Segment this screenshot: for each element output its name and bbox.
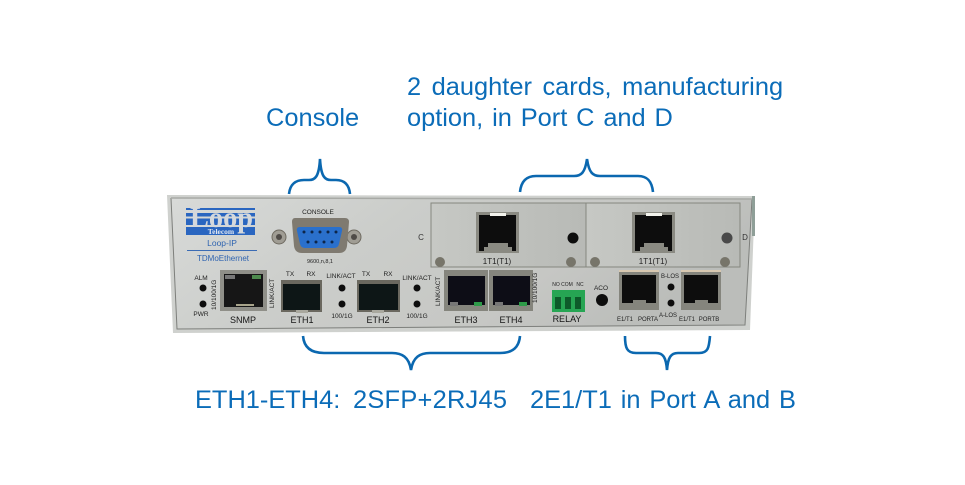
daughter card slot C: 1T1(T1) [483,257,512,266]
LEDs: B-LOS and A-LOS: A-LOS [659,313,677,319]
console connector: CONSOLE [302,209,335,216]
label: TDMoEthernet: TDMoEthernet [197,254,250,263]
LEDs: B-LOS and A-LOS [659,274,679,319]
LEDs: B-LOS and A-LOS: B-LOS [661,274,679,280]
bracket: daughter cards [520,159,653,192]
SNMP port: SNMP [230,315,256,325]
bracket: console [289,159,350,194]
relay connector: NO [552,282,560,288]
SFP port ETH1: RX [306,271,316,278]
LEDs: ETH2 link and speed [402,275,432,320]
SFP port ETH1: TX [286,271,295,278]
relay connector: COM [561,282,573,288]
Port A: PORTA [638,317,658,323]
caption: ETH ports: ETH1-ETH4: [195,386,340,414]
label: 10/100/1G beside ETH4: 10/100/1G [532,273,539,303]
caption: daughter cards: option, in Port C and D [407,104,673,132]
SFP port ETH1: ETH1 [290,315,314,325]
ACO button: ACO [594,285,608,292]
device front panel [167,195,755,333]
status LEDs: ALM and PWR [193,275,209,318]
label: Loop-IP: Loop-IP [207,238,237,248]
caption: daughter cards: 2 daughter cards, manufacturing [407,73,783,101]
ETH4 port [489,270,533,325]
daughter card slot D [586,203,748,267]
SFP port ETH1 [281,271,322,325]
daughter card slot D: D [742,233,748,242]
daughter card slot D: 1T1(T1) [639,257,668,266]
Port B: E1/T1 [679,317,696,323]
ETH3 port [444,270,488,325]
Port A: E1/T1 [617,317,634,323]
caption: daughter cards [407,73,783,132]
label: 10/100/1G: 10/100/1G [211,280,218,310]
status LEDs: ALM and PWR: ALM [194,275,208,282]
ETH3 port: ETH3 [454,315,478,325]
Port A [617,270,659,323]
Port B: PORTB [699,317,719,323]
relay connector: RELAY [553,314,581,324]
LEDs: ETH1 link and speed: 100/1G [331,313,353,320]
ACO button [594,285,608,306]
console connector [272,209,361,265]
daughter card slot C [418,203,586,267]
SFP port ETH2 [357,271,400,325]
LEDs: ETH2 link and speed: LINK/ACT [402,275,432,282]
SFP port ETH2: RX [383,271,393,278]
Port B [679,270,721,323]
status LEDs: ALM and PWR: PWR [193,311,209,318]
caption: ETH ports: 2SFP+2RJ45 [353,386,507,414]
relay connector [552,282,585,324]
LEDs: ETH1 link and speed: LINK/ACT [326,273,356,280]
logo: Loop Telecom: Loop [190,201,253,234]
logo: Loop Telecom: Telecom [208,227,235,236]
ETH4 port: ETH4 [499,315,523,325]
caption: Console: Console [266,104,359,132]
SFP port ETH2: TX [362,271,371,278]
label: LINK/ACT beside ETH3: LINK/ACT [435,277,442,306]
SNMP port [220,270,267,325]
relay connector: NC [576,282,584,288]
caption: E1/T1 ports: 2E1/T1 in Port A and B [530,386,796,414]
LEDs: ETH2 link and speed: 100/1G [406,313,428,320]
LEDs: ETH1 link and speed [326,273,356,320]
bracket: E1/T1 ports [625,336,710,370]
label: LINK/ACT rotated: LINK/ACT [269,279,276,308]
console connector: 9600,n,8,1 [307,259,333,265]
daughter card slot C: C [418,233,424,242]
bracket: ETH ports [303,336,520,370]
SFP port ETH2: ETH2 [366,315,390,325]
